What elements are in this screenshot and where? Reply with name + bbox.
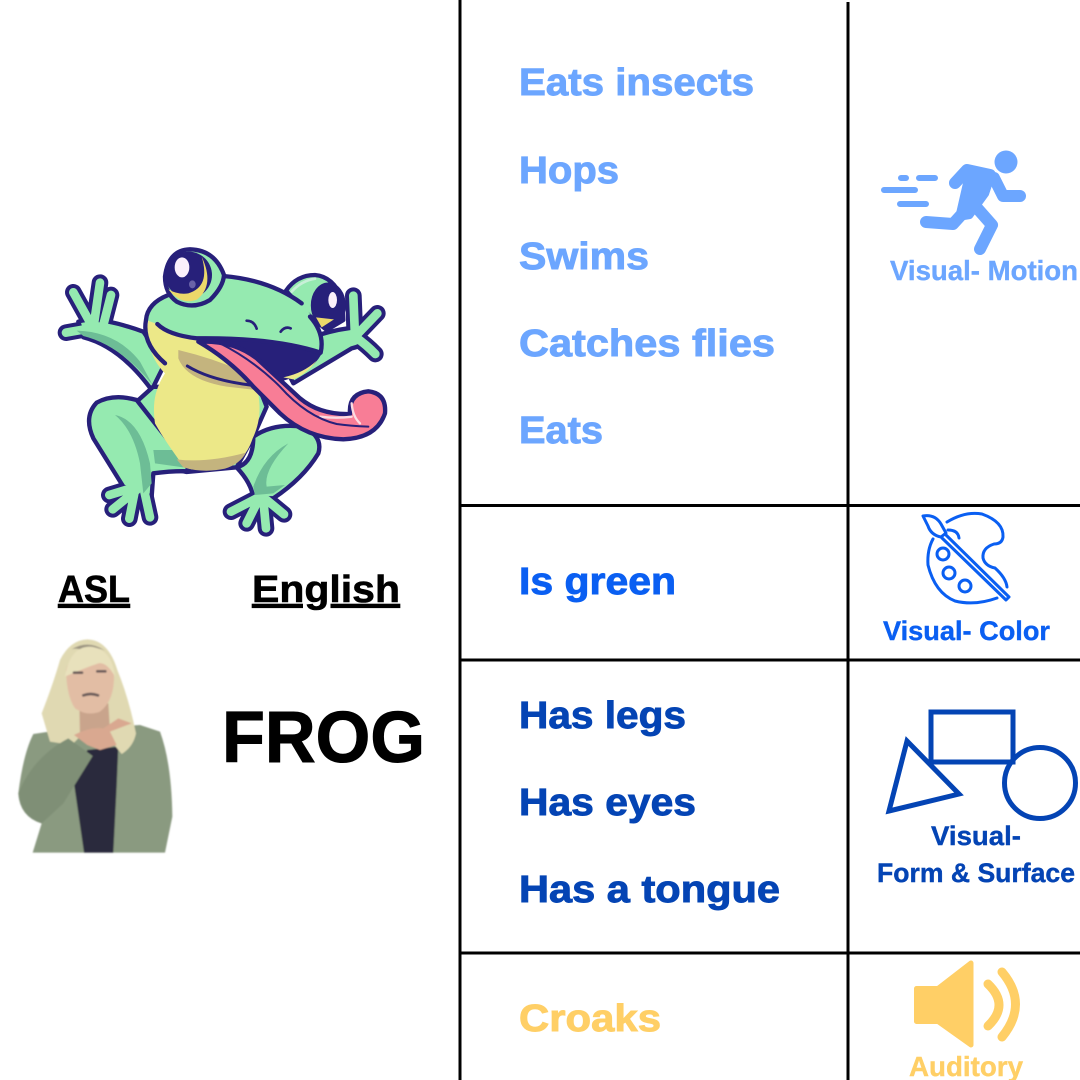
motion feature list: Eats insects (519, 62, 754, 104)
frog lower lip (283, 361, 317, 379)
motion feature list: Hops (519, 150, 619, 192)
table grid lines (460, 0, 1080, 1080)
ASL heading: ASL (58, 569, 130, 611)
label: visual form and surface (877, 821, 1075, 888)
signer sleeve (18, 738, 93, 823)
frog left leg shading (115, 415, 183, 493)
frog arm shading (77, 331, 153, 385)
auditory feature: Croaks (519, 998, 661, 1040)
frog left leg (89, 397, 190, 497)
signer hands (74, 718, 132, 750)
frog left foot fill (109, 487, 150, 519)
frog right foot fill (231, 497, 284, 528)
signer dark top (74, 747, 118, 853)
frog left hand fill (66, 283, 111, 333)
frog throat crease (187, 366, 250, 385)
signer neck (79, 703, 110, 737)
frog right arm (283, 327, 365, 383)
signer hair roots (72, 645, 105, 654)
frog head outline (145, 276, 322, 363)
label: visual form and surface: Visual- (931, 821, 1021, 851)
signer eyes and mouth (74, 671, 105, 695)
frog tongue highlight (320, 403, 360, 423)
form and surface feature list: Has eyes (519, 782, 696, 824)
label: visual form and surface: Form & Surface (877, 858, 1075, 888)
label: visual color: Visual- Color (883, 616, 1050, 646)
frog left arm (78, 320, 165, 390)
signer hair (42, 639, 136, 754)
colour feature: Is green (519, 561, 676, 603)
signer jacket (18, 725, 172, 853)
frog right foot outline (231, 497, 284, 528)
signer fringe (65, 647, 115, 677)
icon: speaker (916, 963, 1016, 1045)
frog mouth (197, 338, 320, 379)
frog tongue (198, 342, 385, 439)
frog head (146, 276, 321, 353)
frog nostrils (247, 321, 291, 332)
frog right hand outline (353, 296, 377, 354)
icon: geometric shapes (889, 712, 1076, 818)
motion feature list: Eats (519, 410, 603, 452)
frog belly shading (177, 350, 257, 471)
frog left hand outline (66, 283, 111, 333)
icon: running person (884, 150, 1020, 249)
frog illustration (66, 249, 385, 528)
form and surface feature list: Has a tongue (519, 869, 780, 911)
frog right hand fill (353, 296, 377, 354)
frog belly (147, 320, 260, 470)
motion feature list: Swims (519, 236, 649, 278)
signer face (66, 655, 114, 714)
frog tongue centre line (220, 343, 368, 427)
signer photo illustration (18, 639, 172, 853)
FROG word: FROG (222, 698, 425, 778)
label: visual motion: Visual- Motion (890, 255, 1078, 286)
frog right leg (237, 426, 319, 498)
frog torso sides (137, 387, 267, 472)
icon: paint palette and brush (923, 513, 1009, 603)
form and surface feature list (519, 695, 780, 911)
frog left foot outline (109, 487, 150, 519)
form and surface feature list: Has legs (519, 695, 686, 737)
English heading: English (252, 569, 400, 611)
frog front eye (165, 249, 224, 305)
motion feature list: Catches flies (519, 323, 775, 365)
motion feature list (519, 62, 775, 452)
frog right leg shading (253, 443, 288, 495)
frog back eye (286, 275, 344, 330)
